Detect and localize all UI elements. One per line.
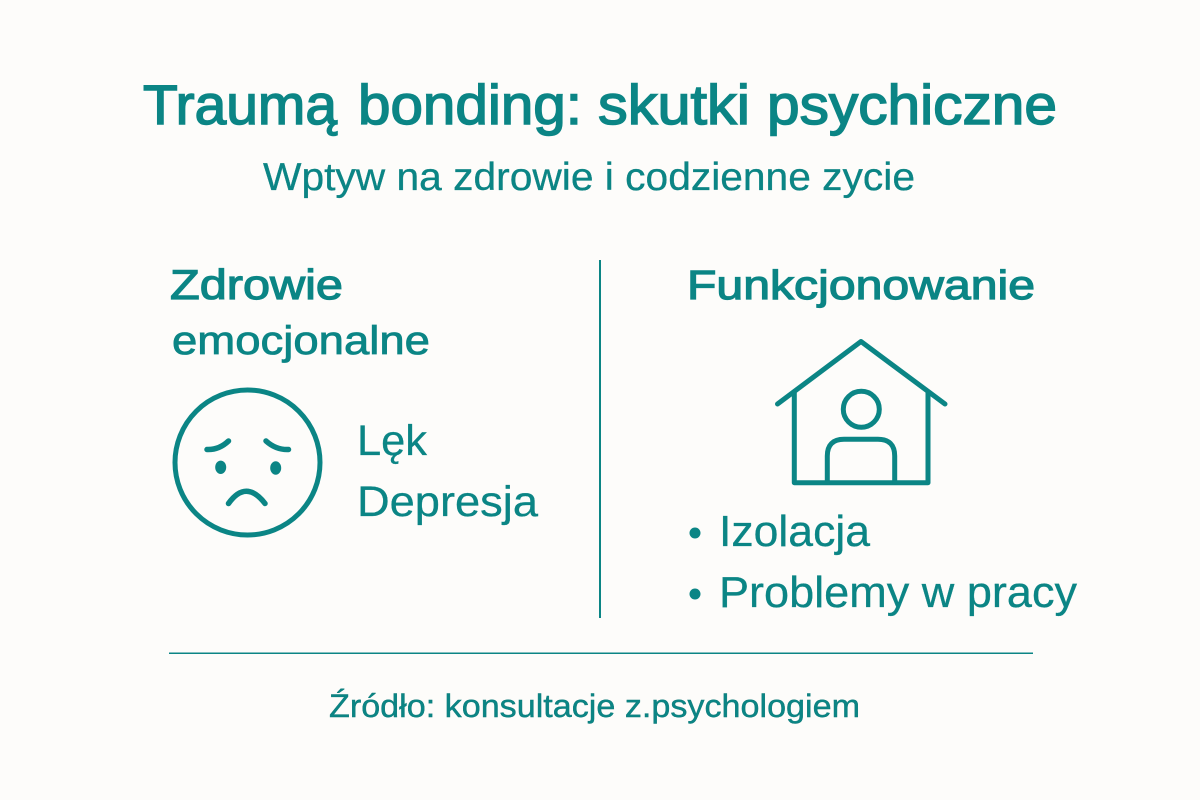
panel: functioning [687, 262, 1077, 617]
source note: Źródło: konsultacje z.psychologiem [329, 688, 860, 724]
heading: Funkcjonowanie: Funkcjonowanie [687, 262, 1035, 308]
bullet: Izolacja: Izolacja [719, 507, 871, 556]
vertical divider [599, 260, 601, 618]
title: Traumą [143, 73, 338, 136]
heading: Zdrowie: Zdrowie [170, 261, 343, 308]
title: bonding: [358, 73, 582, 136]
subheading: emocjonalne: emocjonalne [172, 319, 430, 363]
label: Lęk: Lęk [357, 417, 427, 465]
horizontal divider [169, 652, 1033, 654]
title [143, 73, 1057, 136]
bullet list [690, 507, 1077, 617]
panel: emotional health [170, 261, 538, 535]
bullet: Problemy w pracy: Problemy w pracy [719, 568, 1077, 617]
title: psychiczne [767, 73, 1057, 136]
icon: person in house [778, 342, 945, 483]
title: skutki [598, 73, 750, 136]
subtitle: Wptyw na zdrowie i codzienne zycie [263, 156, 915, 199]
icon: sad face [175, 390, 320, 535]
label: Depresja: Depresja [357, 478, 538, 526]
